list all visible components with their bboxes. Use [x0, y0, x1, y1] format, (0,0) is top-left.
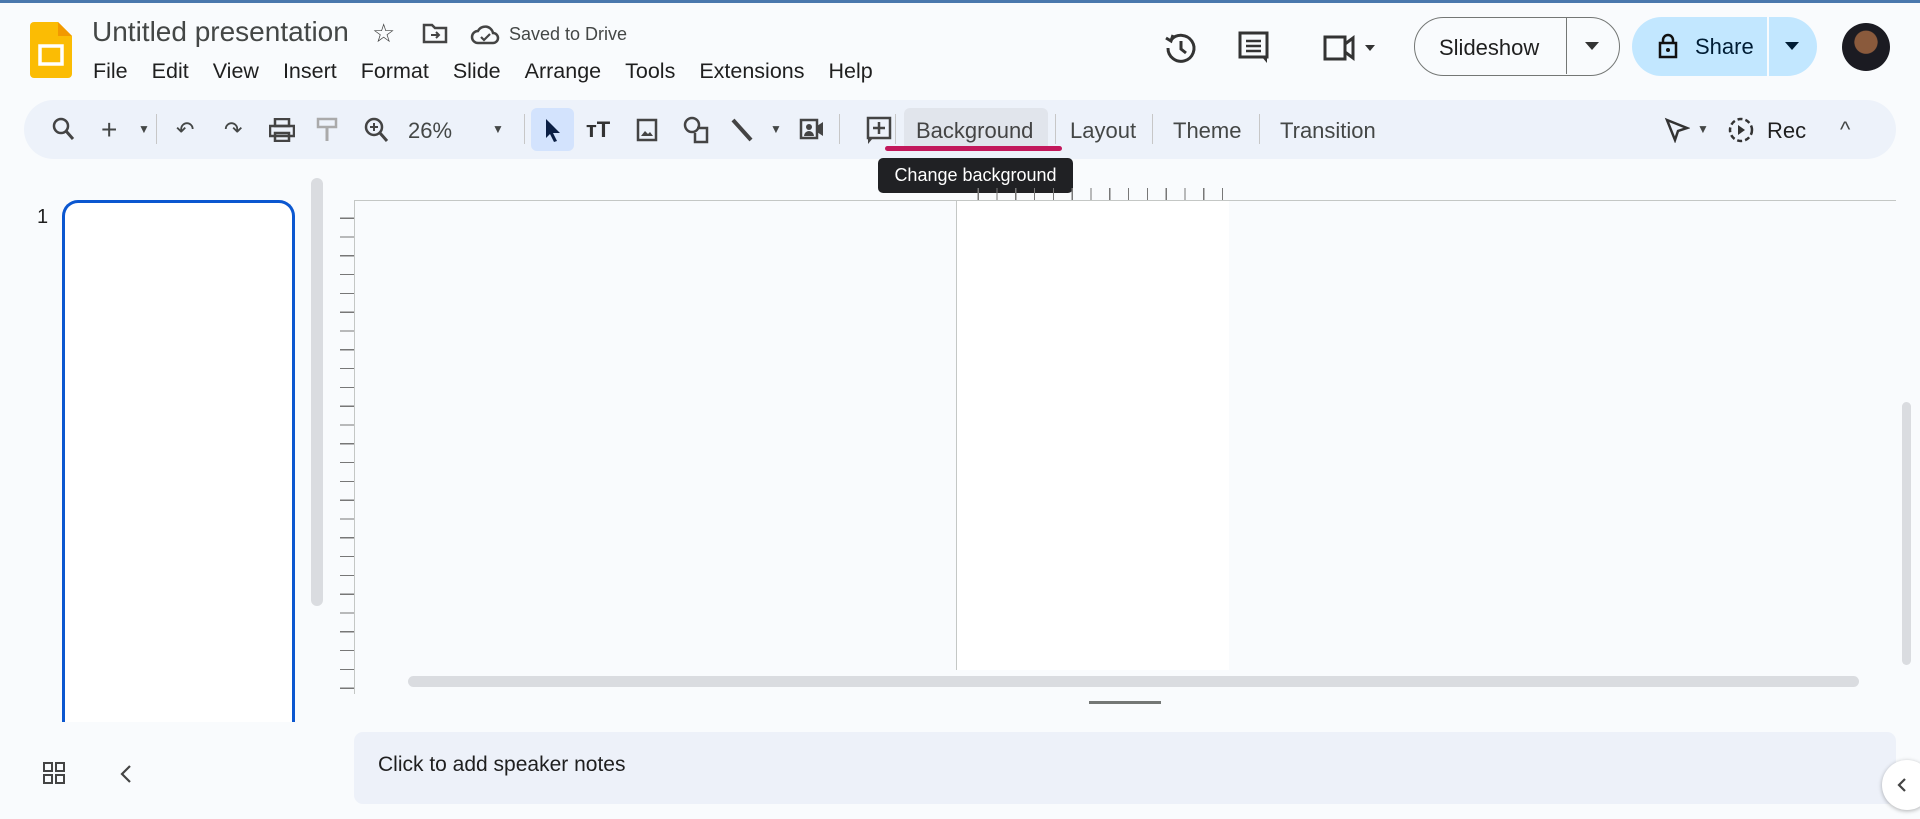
toolbar: ▼: [770, 122, 782, 136]
slide canvas: [956, 201, 1229, 670]
drag handle: [1089, 701, 1161, 704]
toolbar: +: [101, 114, 117, 145]
horizontal scrollbar: [408, 676, 1859, 687]
toolbar: Transition: [1280, 118, 1376, 143]
side panel toggle: [1882, 760, 1920, 810]
save status: Saved to Drive: [509, 24, 627, 44]
tooltip: Change background: [894, 165, 1057, 185]
toolbar: ↶: [176, 117, 194, 142]
icon: slides logo: [30, 22, 72, 78]
top border: [0, 0, 1920, 3]
slide thumbnail: [62, 200, 295, 722]
toolbar: Rec: [1767, 118, 1806, 143]
share button: [1632, 17, 1817, 76]
menu bar: File Edit View Insert Format Slide Arrange Tools Extensions Help: [93, 59, 873, 83]
toolbar: ▼: [1697, 122, 1709, 136]
speaker notes: [354, 732, 1896, 804]
toolbar: ▼: [492, 122, 504, 136]
slideshow button: [1414, 17, 1620, 76]
slide number: 1: [37, 206, 48, 228]
tooltip: [878, 158, 1073, 193]
toolbar: 26%: [408, 118, 452, 143]
active underline: [885, 146, 1062, 151]
icons: star folder cloud: ☆: [372, 18, 395, 48]
slideshow button: Slideshow: [1439, 35, 1539, 60]
toolbar: Theme: [1173, 118, 1241, 143]
share button: Share: [1695, 34, 1754, 59]
header icons: [1165, 32, 1375, 63]
title: Untitled presentation: [92, 16, 349, 47]
left scrollbar: [311, 178, 323, 606]
avatar: [1842, 23, 1890, 71]
toolbar: тT: [586, 117, 610, 142]
toolbar: [24, 100, 1896, 159]
top ruler line: [354, 200, 1896, 201]
vertical ruler: [340, 200, 355, 694]
toolbar: ▼: [138, 122, 150, 136]
speaker notes: Click to add speaker notes: [378, 753, 625, 776]
toolbar: Background: [916, 118, 1033, 143]
right scrollbar: [1902, 402, 1911, 665]
toolbar: ^: [1840, 117, 1850, 142]
toolbar: Layout: [1070, 118, 1136, 143]
icon: collapse arrow: [120, 765, 131, 783]
icon: grid view: [43, 762, 65, 784]
toolbar: ↷: [224, 117, 242, 142]
